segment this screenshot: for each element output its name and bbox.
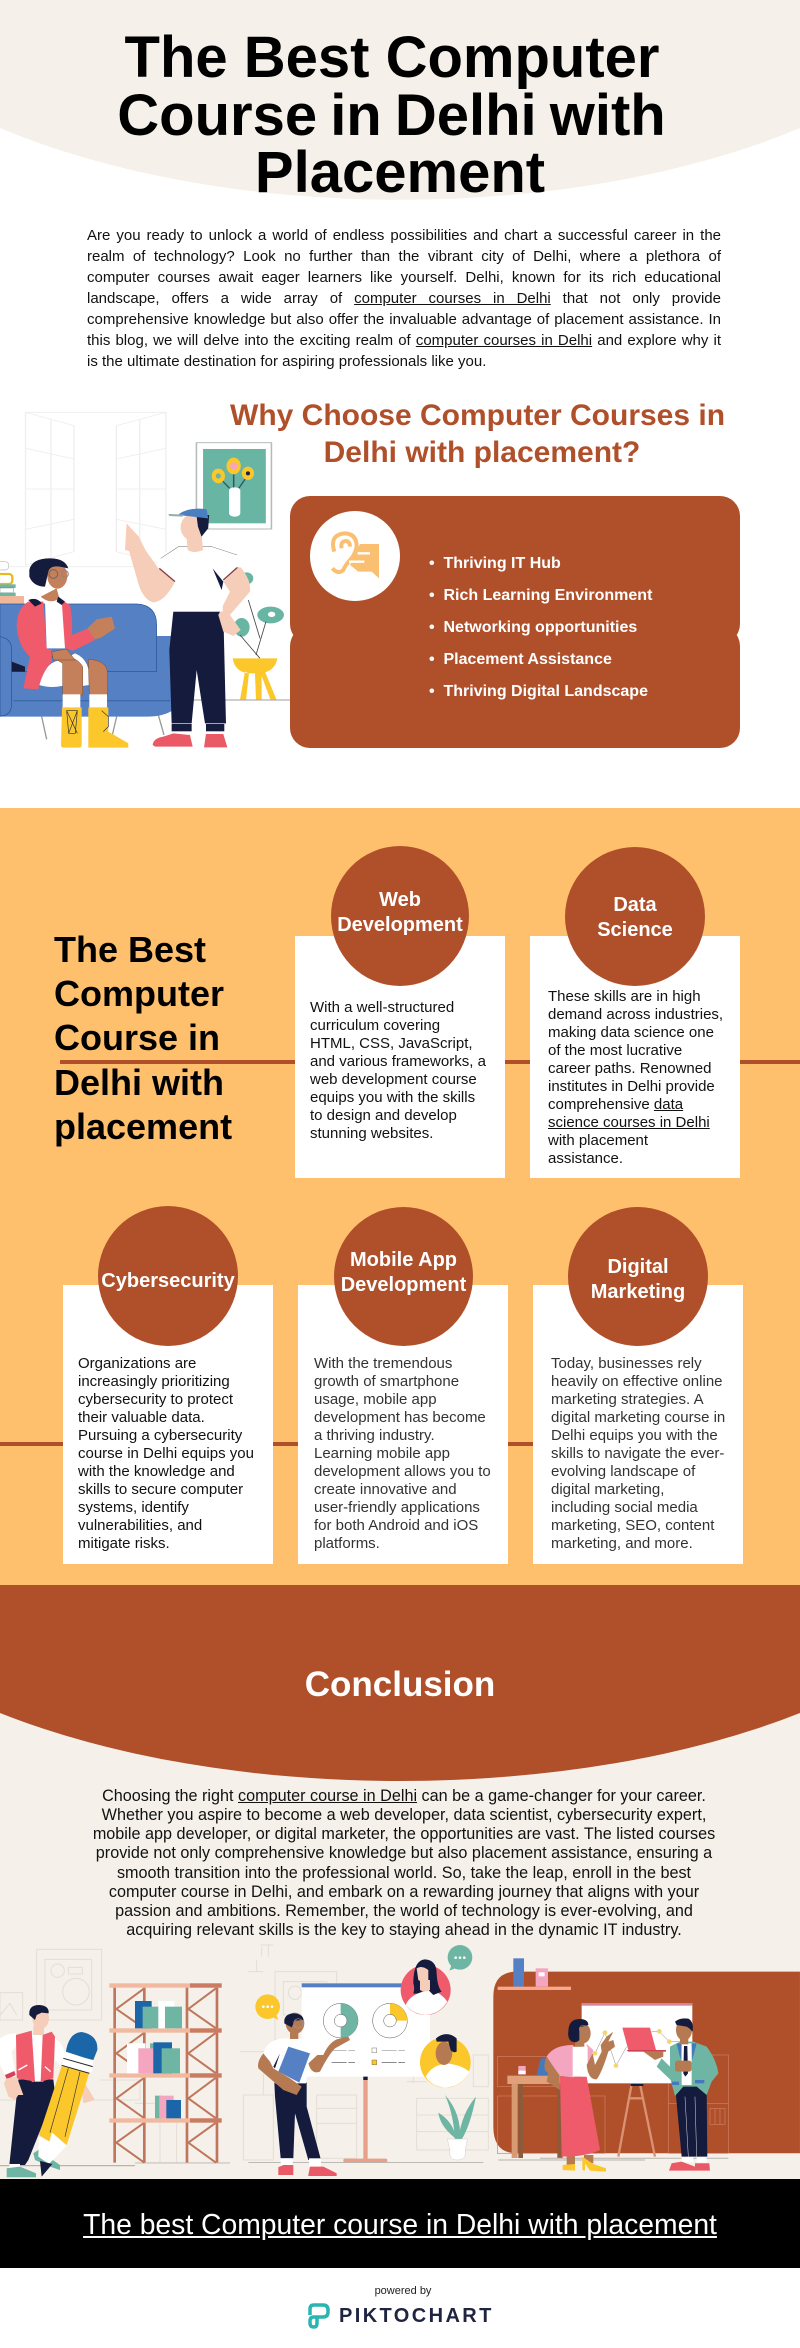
card: mobile app development xyxy=(298,1207,508,1564)
panel background upper xyxy=(290,496,740,644)
circle heading xyxy=(334,1207,473,1346)
title: Development xyxy=(337,914,463,936)
intro paragraph: landscape, offers a wide array of computer courses in Delhi that not only provide xyxy=(87,290,721,306)
card: cybersecurity xyxy=(63,1206,273,1564)
card: web development xyxy=(295,846,505,1178)
body text: marketing, SEO, content xyxy=(551,1517,714,1534)
body text: career paths. Renowned xyxy=(548,1060,711,1077)
title: The Best Computer xyxy=(125,25,659,90)
body text: curriculum covering xyxy=(310,1017,440,1034)
card body xyxy=(530,936,740,1178)
title xyxy=(597,894,673,941)
conclusion paragraph: Choosing the right computer course in Delhi can be a game-changer for your career. xyxy=(102,1787,706,1805)
body text: platforms. xyxy=(314,1535,380,1552)
bullet list: • Thriving IT Hub xyxy=(429,555,561,572)
body text: including social media xyxy=(551,1499,698,1516)
body text: create innovative and xyxy=(314,1481,457,1498)
body text: growth of smartphone xyxy=(314,1373,459,1390)
title: Digital xyxy=(607,1256,669,1278)
heading: why choose: Why Choose Computer Courses in xyxy=(230,399,725,432)
title: Data xyxy=(613,894,657,916)
body text xyxy=(548,988,723,1167)
bullet list: • Placement Assistance xyxy=(429,651,612,668)
circle heading xyxy=(568,1207,708,1346)
bullet list: • Rich Learning Environment xyxy=(429,587,652,604)
illustration: two people talking in a living room xyxy=(0,412,290,748)
body text: evolving landscape of xyxy=(551,1463,695,1480)
body text: equips you with the skills xyxy=(310,1089,475,1106)
body text: HTML, CSS, JavaScript, xyxy=(310,1035,473,1052)
intro paragraph xyxy=(87,226,722,370)
card: digital marketing xyxy=(533,1207,743,1564)
conclusion cream background xyxy=(0,1585,800,2179)
circle heading xyxy=(565,847,705,986)
body text: with placement xyxy=(548,1132,648,1149)
body text: With a well-structured xyxy=(310,999,454,1016)
header curved background xyxy=(0,0,800,200)
body text: marketing strategies. A xyxy=(551,1391,704,1408)
body text: mitigate risks. xyxy=(78,1535,170,1552)
circle heading xyxy=(331,846,469,986)
body text: marketing, and more. xyxy=(551,1535,693,1552)
intro paragraph: computer courses await eager learners like yourself. Delhi, known for its rich educational xyxy=(87,268,721,286)
body text: with the knowledge and xyxy=(78,1463,235,1480)
bullet list: • Thriving Digital Landscape xyxy=(429,683,648,700)
body text: digital marketing course in xyxy=(551,1409,725,1426)
body text: vulnerabilities, and xyxy=(78,1517,202,1534)
body text: development allows you to xyxy=(314,1463,491,1480)
body text: of the most lucrative xyxy=(548,1042,682,1059)
conclusion curved banner xyxy=(0,1585,800,1781)
body text: Pursuing a cybersecurity xyxy=(78,1427,242,1444)
body text: demand across industries, xyxy=(548,1006,723,1023)
body text xyxy=(310,999,486,1142)
title: Marketing xyxy=(591,1281,685,1303)
conclusion paragraph: passion and ambitions. Remember, the world of technology is ever-evolving, and xyxy=(115,1902,693,1920)
body text: science courses in Delhi xyxy=(548,1114,710,1131)
title xyxy=(117,25,666,205)
intro paragraph: realm of technology? Look no further than the vibrant city of Delhi, where a plethora of xyxy=(87,248,721,264)
bullet list: • Networking opportunities xyxy=(429,619,637,636)
intro paragraph: comprehensive knowledge but also offer the invaluable advantage of placement assistance. In xyxy=(87,310,721,328)
body text xyxy=(314,1355,491,1552)
intro paragraph: is the ultimate destination for aspiring professionals like you. xyxy=(87,352,486,370)
section heading: Course in xyxy=(54,1017,220,1058)
title: Course in Delhi with xyxy=(117,82,666,148)
conclusion paragraph xyxy=(93,1787,715,1939)
title xyxy=(341,1249,466,1296)
title: Placement xyxy=(255,140,545,205)
body text: assistance. xyxy=(548,1150,623,1167)
body text: and various frameworks, a xyxy=(310,1053,486,1070)
card body xyxy=(63,1285,273,1564)
body text: digital marketing, xyxy=(551,1481,664,1498)
logo wordmark: PIKTOCHART xyxy=(339,2305,494,2327)
circle heading xyxy=(98,1206,238,1346)
body text: a thriving industry. xyxy=(314,1427,435,1444)
conclusion paragraph: computer course in Delhi, and embark on a rewarding journey that aligns with your xyxy=(109,1883,699,1901)
body text: systems, identify xyxy=(78,1499,189,1516)
bullet list xyxy=(429,555,652,700)
heading: why choose xyxy=(230,399,725,469)
timeline line row two xyxy=(0,1442,743,1446)
conclusion paragraph: provide not only comprehensive knowledge but also placement assistance, ensuring a xyxy=(96,1844,712,1862)
title: Web xyxy=(379,889,421,911)
footer black banner xyxy=(0,2179,800,2268)
conclusion paragraph: smooth transition into the professional world. So, take the leap, enroll in the best xyxy=(117,1864,691,1882)
title: Development xyxy=(341,1274,466,1296)
title: Mobile App xyxy=(350,1249,457,1271)
panel: orange course section xyxy=(0,808,800,1585)
conclusion paragraph: Whether you aspire to become a web developer, data scientist, cybersecurity expert, xyxy=(102,1806,706,1824)
intro paragraph: this blog, we will delve into the exciting realm of computer courses in Delhi and explore why it xyxy=(87,332,721,348)
powered by text: powered by xyxy=(375,2285,431,2297)
body text: heavily on effective online xyxy=(551,1373,723,1390)
illustration: office scenes xyxy=(0,1944,800,2178)
body text: cybersecurity to protect xyxy=(78,1391,233,1408)
conclusion paragraph: acquiring relevant skills is the key to staying ahead in the dynamic IT industry. xyxy=(126,1921,682,1939)
title xyxy=(591,1256,685,1303)
body text: usage, mobile app xyxy=(314,1391,437,1408)
card body xyxy=(533,1285,743,1564)
body text: for both Android and iOS xyxy=(314,1517,478,1534)
body text: course in Delhi equips you xyxy=(78,1445,254,1462)
section heading: placement xyxy=(54,1106,232,1147)
conclusion paragraph: mobile app developer, or digital marketer, the opportunities are vast. The listed courses xyxy=(93,1825,715,1843)
body text: Today, businesses rely xyxy=(551,1355,702,1372)
timeline line row one xyxy=(60,1060,800,1064)
conclusion heading: Conclusion xyxy=(305,1665,495,1704)
body text: user-friendly applications xyxy=(314,1499,480,1516)
section heading: The Best xyxy=(54,929,206,970)
body text: their valuable data. xyxy=(78,1409,205,1426)
section heading: Computer xyxy=(54,973,224,1014)
title xyxy=(337,889,463,936)
body text: skills to secure computer xyxy=(78,1481,243,1498)
card body xyxy=(295,936,505,1178)
body text: Learning mobile app xyxy=(314,1445,450,1462)
body text: development has become xyxy=(314,1409,486,1426)
intro paragraph: Are you ready to unlock a world of endless possibilities and chart a successful career in the xyxy=(87,226,721,244)
card body xyxy=(298,1285,508,1564)
body text: stunning websites. xyxy=(310,1125,433,1142)
body text: to design and develop xyxy=(310,1107,457,1124)
body text xyxy=(551,1355,725,1552)
body text: web development course xyxy=(310,1071,477,1088)
body text: comprehensive data xyxy=(548,1096,683,1113)
body text: increasingly prioritizing xyxy=(78,1373,230,1390)
card: data science xyxy=(530,847,740,1178)
panel background lower xyxy=(290,626,740,748)
heading: why choose: Delhi with placement? xyxy=(324,436,640,469)
icon: ear and speech bubble xyxy=(310,511,400,601)
section heading xyxy=(54,929,232,1147)
section heading: Delhi with xyxy=(54,1062,224,1103)
body text: These skills are in high xyxy=(548,988,701,1005)
body text: Delhi equips you with the xyxy=(551,1427,718,1444)
body text: Organizations are xyxy=(78,1355,196,1372)
panel: why choose xyxy=(290,496,740,748)
body text: making data science one xyxy=(548,1024,714,1041)
title: Science xyxy=(597,919,673,941)
body text: institutes in Delhi provide xyxy=(548,1078,715,1095)
body text xyxy=(78,1355,254,1552)
title: Cybersecurity xyxy=(101,1270,235,1292)
logo mark xyxy=(308,2303,330,2329)
footer link text: The best Computer course in Delhi with placement xyxy=(83,2208,717,2240)
body text: skills to navigate the ever- xyxy=(551,1445,724,1462)
piktochart logo xyxy=(308,2303,494,2329)
body text: With the tremendous xyxy=(314,1355,452,1372)
